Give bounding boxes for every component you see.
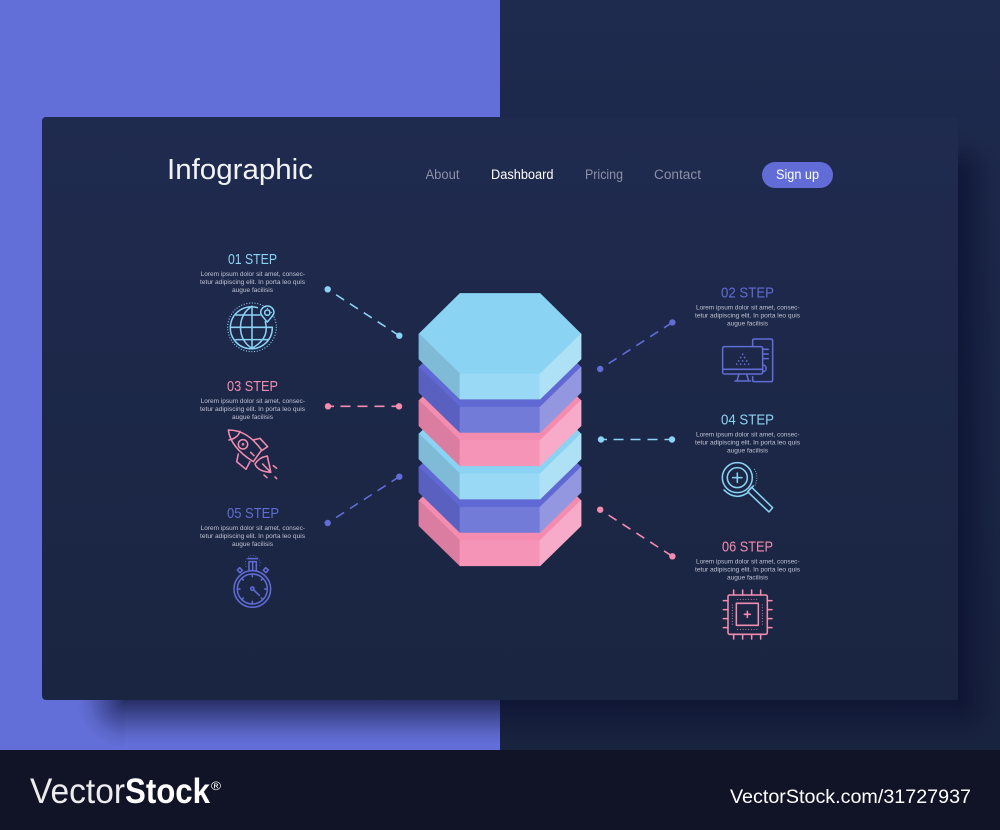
step 05 text: augue facilisis: [232, 541, 273, 548]
step 02 text: augue facilisis: [727, 320, 768, 328]
connector 05: [324, 474, 402, 526]
navigation menu: Pricing: [585, 167, 623, 182]
footer logo: ®: [211, 779, 221, 793]
step 04 block: [695, 412, 800, 512]
step 05 text: Lorem ipsum dolor sit amet, consec-: [201, 525, 305, 532]
step 01 text: [200, 271, 305, 294]
navigation menu: [426, 167, 701, 182]
step 03 block: [200, 378, 305, 479]
step 04 text: tetur adipiscing elit. In porta leo quis: [695, 440, 800, 446]
footer logo: Vector: [30, 772, 125, 811]
step 01 text: tetur adipiscing elit. In porta leo quis: [200, 279, 305, 286]
step 04 heading: 04 STEP: [721, 412, 774, 428]
card shadow: [77, 130, 1000, 748]
step 06 text: [695, 558, 800, 582]
icon: globe with pin: [228, 303, 276, 352]
connector 02: [597, 319, 676, 372]
step 03 heading: 03 STEP: [227, 378, 278, 395]
footer logo: Stock: [125, 772, 210, 811]
connector 03: [325, 403, 402, 409]
icon: rocket: [228, 430, 277, 479]
connector 01: [324, 286, 402, 339]
step 06 text: tetur adipiscing elit. In porta leo quis: [695, 566, 800, 574]
step 02 text: tetur adipiscing elit. In porta leo quis: [695, 312, 800, 320]
background: dark panel: [500, 0, 1000, 750]
step 04 text: [695, 432, 800, 454]
step 04 text: augue facilisis: [727, 448, 768, 454]
layer 5: purple: [419, 427, 581, 532]
step 06 block: [695, 538, 800, 639]
layer 1: blue top: [419, 294, 581, 399]
step 06 text: Lorem ipsum dolor sit amet, consec-: [696, 558, 800, 566]
sign up button: [762, 162, 833, 188]
layer 2: purple: [419, 327, 581, 432]
step 03 text: augue facilisis: [232, 414, 273, 421]
navigation menu: Contact: [654, 167, 701, 182]
icon: magnifier: [722, 463, 773, 512]
step 05 text: [200, 525, 305, 548]
icon: stopwatch: [234, 555, 271, 607]
step 01 block: [200, 251, 305, 352]
background: purple panel: [0, 0, 500, 750]
step 02 heading: 02 STEP: [721, 284, 774, 302]
step 05 text: tetur adipiscing elit. In porta leo quis: [200, 533, 305, 540]
navigation menu: Dashboard: [491, 167, 554, 182]
footer bar: [0, 750, 1000, 830]
step 01 text: Lorem ipsum dolor sit amet, consec-: [201, 271, 305, 278]
icon: microchip: [723, 590, 772, 639]
connector 06: [597, 506, 676, 560]
step 03 text: Lorem ipsum dolor sit amet, consec-: [201, 398, 305, 405]
layer 4: blue: [419, 394, 581, 499]
icon: desktop computer: [723, 339, 773, 382]
navigation menu: About: [426, 167, 460, 182]
layer 3: pink: [419, 360, 581, 466]
step 02 block: [695, 284, 800, 382]
connector 04: [598, 436, 675, 443]
step 03 text: [200, 398, 305, 421]
step 06 text: augue facilisis: [727, 574, 768, 582]
step 06 heading: 06 STEP: [722, 538, 773, 556]
footer logo: [30, 772, 221, 811]
step 02 text: Lorem ipsum dolor sit amet, consec-: [696, 304, 800, 312]
step 05 heading: 05 STEP: [227, 505, 279, 522]
step 05 block: [200, 505, 305, 607]
step 02 text: [695, 304, 800, 328]
sign up button: Sign up: [776, 167, 819, 182]
step 01 heading: 01 STEP: [228, 251, 277, 268]
step 03 text: tetur adipiscing elit. In porta leo quis: [200, 406, 305, 413]
footer url: VectorStock.com/31727937: [730, 787, 971, 808]
main card panel: [42, 117, 958, 700]
central hexagon stack: [419, 294, 581, 566]
step 01 text: augue facilisis: [232, 287, 273, 294]
step 04 text: Lorem ipsum dolor sit amet, consec-: [696, 432, 800, 438]
title: Infographic: [167, 154, 313, 186]
layer 6: pink: [419, 460, 581, 566]
